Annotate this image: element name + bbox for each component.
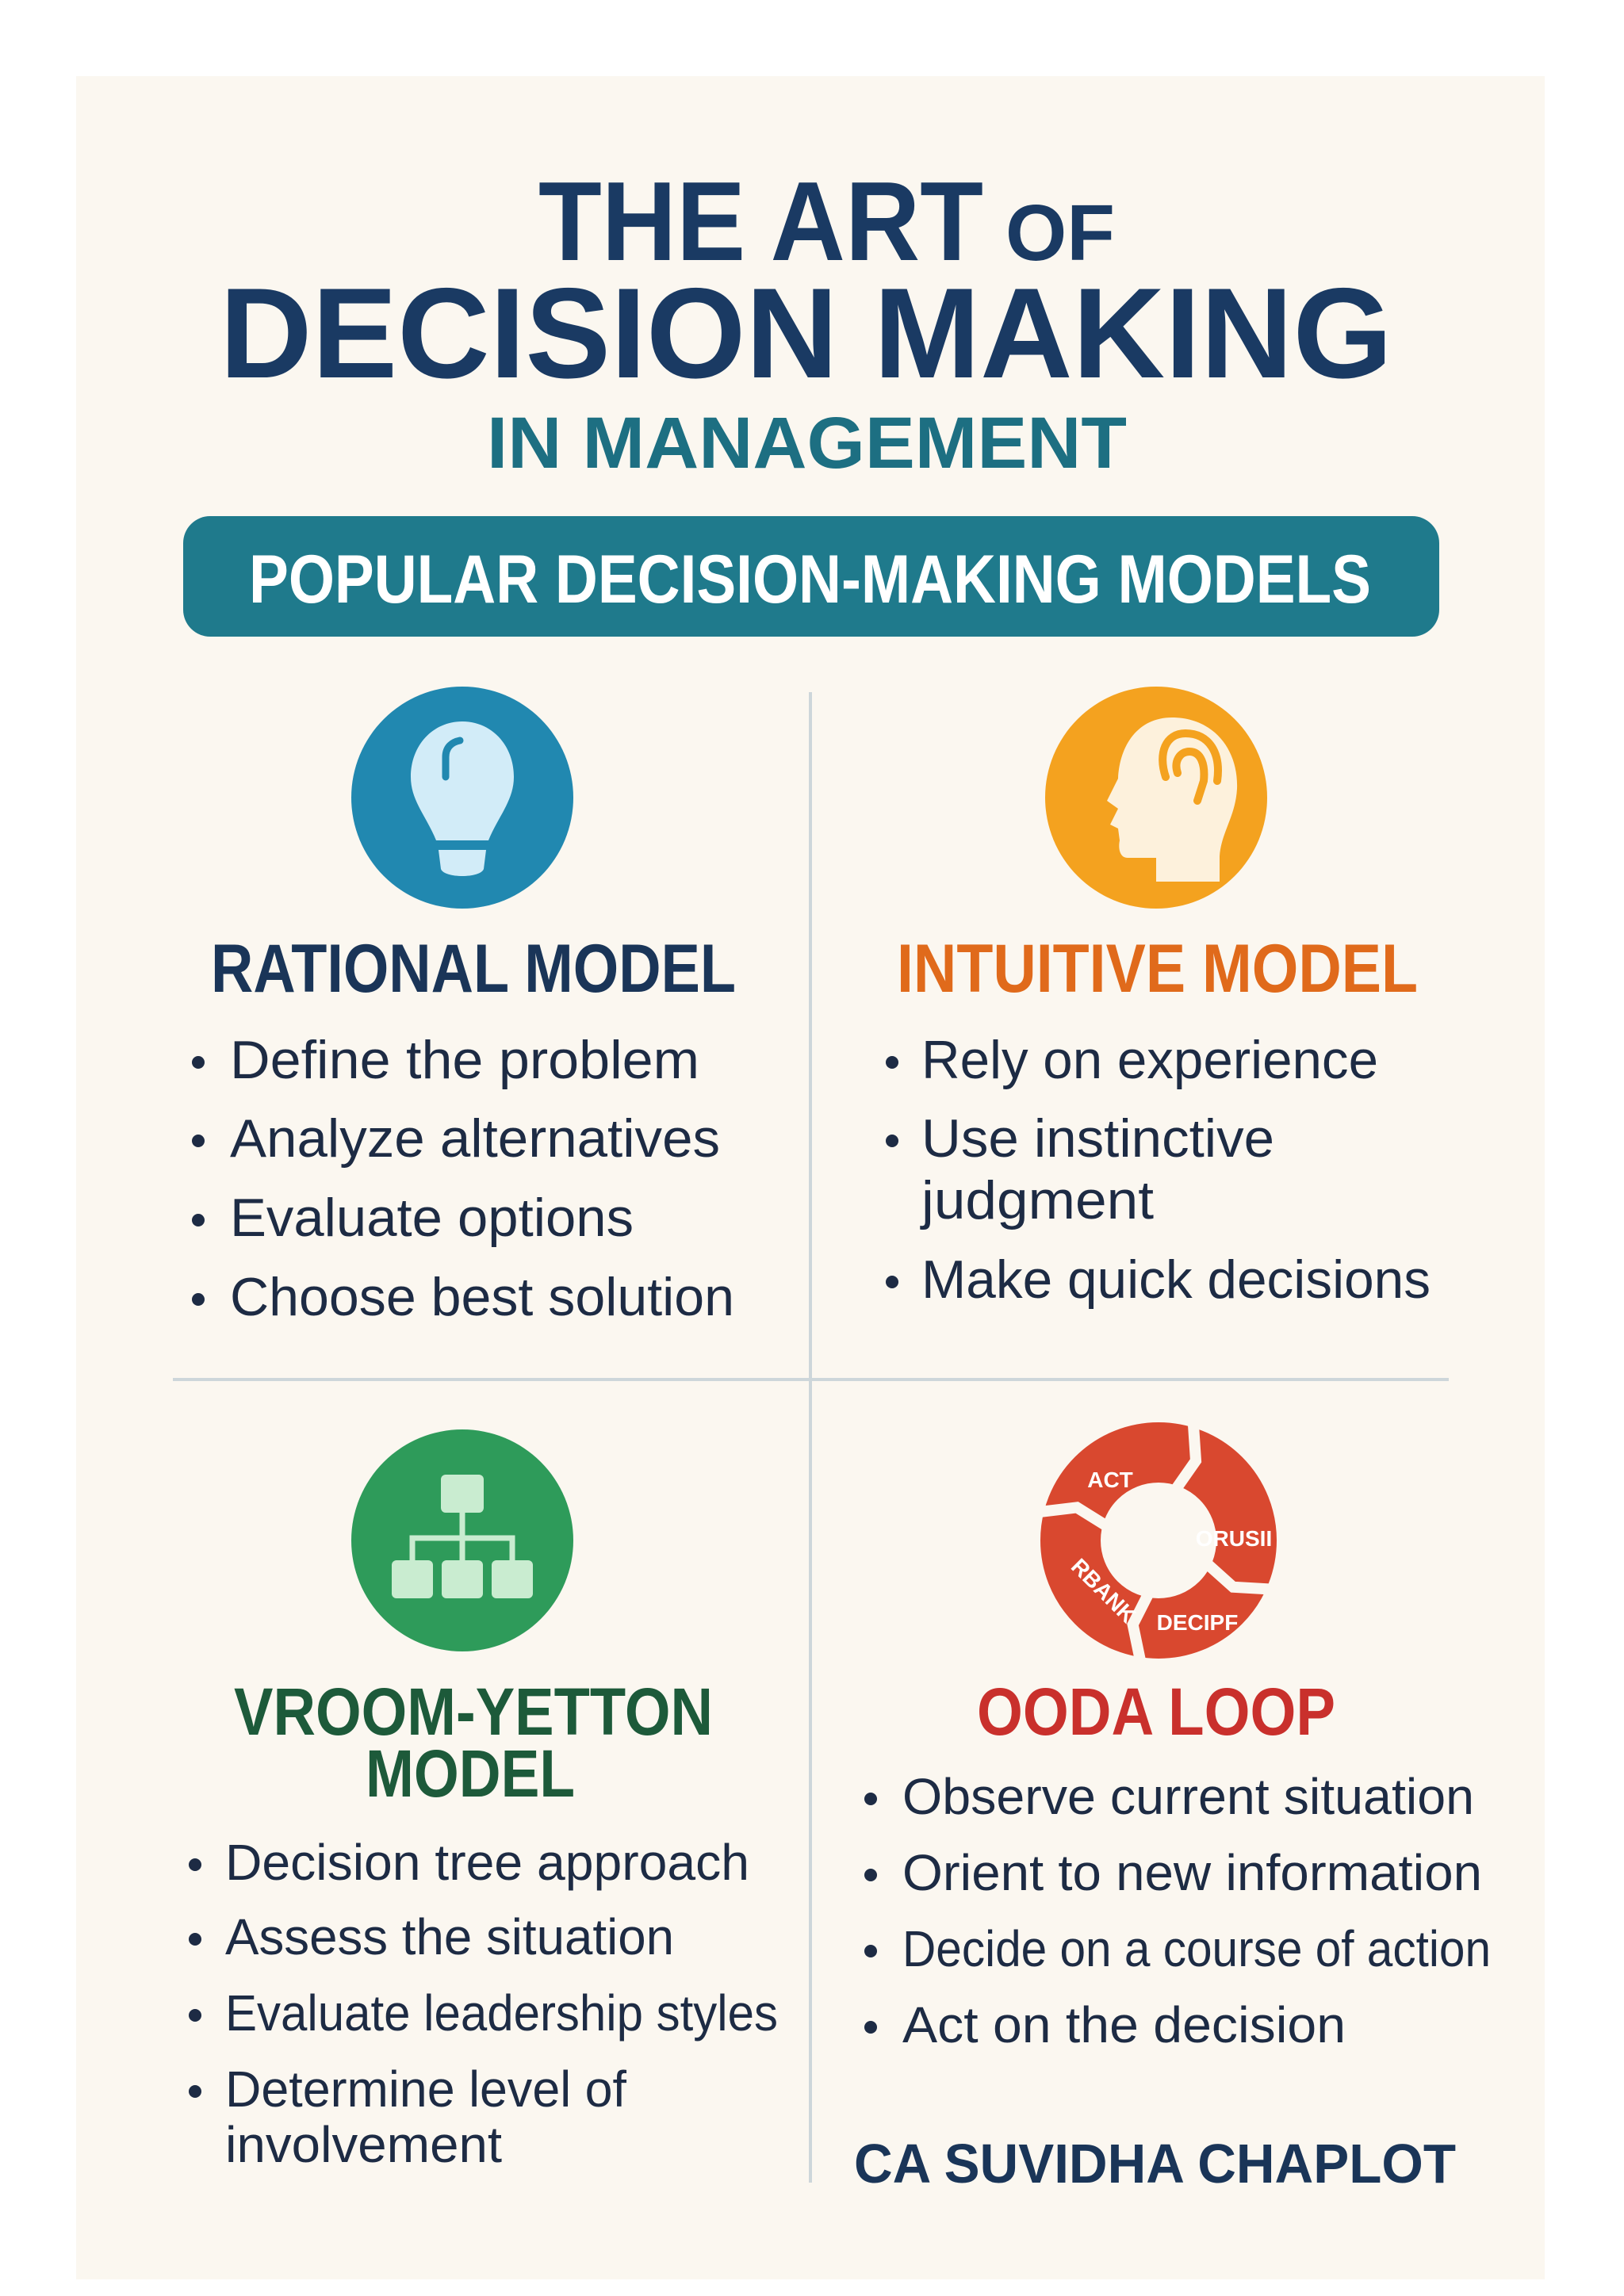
title: OF bbox=[1005, 189, 1115, 277]
heading: vroom-yetton: MODEL bbox=[366, 1736, 575, 1811]
bullet list: ooda: Act on the decision bbox=[902, 1996, 1346, 2053]
title bbox=[220, 159, 1392, 405]
subtitle: IN MANAGEMENT bbox=[487, 403, 1127, 484]
bullet list: intuitive: judgment bbox=[920, 1170, 1154, 1230]
bullet list: vroom: involvement bbox=[225, 2116, 502, 2173]
bullet list: ooda: Observe current situation bbox=[902, 1768, 1474, 1825]
icon: ooda cycle: ACT bbox=[1087, 1468, 1133, 1492]
heading: vroom-yetton: VROOM-YETTON bbox=[234, 1674, 713, 1749]
bullet list: vroom: Decision tree approach bbox=[225, 1834, 749, 1891]
heading: vroom-yetton bbox=[234, 1674, 713, 1811]
bullet list: rational: Evaluate options bbox=[230, 1188, 634, 1248]
icon: ooda cycle: DECIPF bbox=[1157, 1610, 1238, 1635]
heading: ooda loop: OODA LOOP bbox=[977, 1674, 1335, 1749]
icon: head bbox=[1045, 687, 1267, 909]
bullet list: vroom: Evaluate leadership styles bbox=[225, 1984, 778, 2042]
author credit: CA SUVIDHA CHAPLOT bbox=[854, 2133, 1456, 2195]
panel: intuitive model bbox=[886, 687, 1431, 1310]
bullet list: rational: Define the problem bbox=[230, 1030, 699, 1090]
icon: ooda cycle: ORUSII bbox=[1196, 1526, 1272, 1551]
banner: POPULAR DECISION-MAKING MODELS bbox=[249, 541, 1371, 618]
bullet list: vroom bbox=[189, 1834, 778, 2173]
bullet list: intuitive: Rely on experience bbox=[921, 1030, 1378, 1090]
bullet list: rational: Choose best solution bbox=[230, 1267, 734, 1327]
banner bbox=[183, 516, 1439, 637]
bullet list: ooda bbox=[864, 1768, 1491, 2053]
bullet list: vroom: Assess the situation bbox=[225, 1908, 674, 1965]
bullet list: vroom: Determine level of bbox=[225, 2061, 626, 2118]
icon: org chart bbox=[351, 1429, 573, 1651]
title: DECISION MAKING bbox=[220, 262, 1392, 405]
bullet list: intuitive bbox=[886, 1030, 1431, 1310]
icon: lightbulb bbox=[351, 687, 573, 909]
bullet list: ooda: Orient to new information bbox=[902, 1844, 1482, 1901]
heading: intuitive model: INTUITIVE MODEL bbox=[897, 931, 1418, 1007]
bullet list: rational bbox=[192, 1030, 734, 1327]
heading: rational model: RATIONAL MODEL bbox=[211, 931, 736, 1007]
bullet list: ooda: Decide on a course of action bbox=[902, 1920, 1491, 1977]
icon: ooda cycle: RBANK bbox=[1067, 1554, 1140, 1628]
bullet list: rational: Analyze alternatives bbox=[230, 1108, 720, 1169]
bullet list: intuitive: Use instinctive bbox=[921, 1108, 1274, 1169]
bullet list: intuitive: Make quick decisions bbox=[921, 1249, 1431, 1310]
title: THE ART bbox=[538, 159, 983, 285]
panel: vroom-yetton model bbox=[189, 1429, 778, 2173]
panel: ooda loop bbox=[864, 1414, 1491, 2053]
icon: ooda cycle bbox=[1030, 1414, 1281, 1671]
panel: rational model bbox=[192, 687, 736, 1327]
